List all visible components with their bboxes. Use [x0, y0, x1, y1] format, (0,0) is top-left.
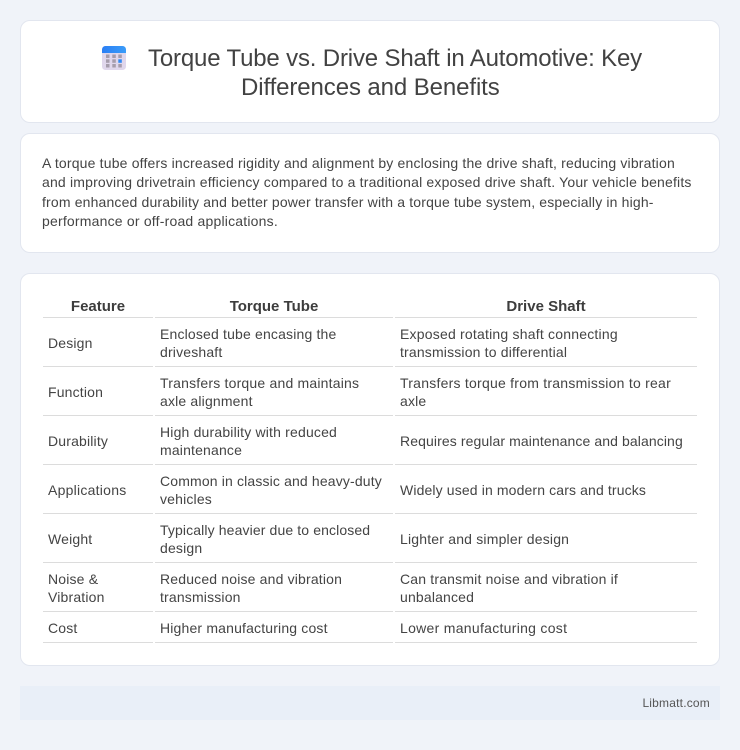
- panel: comparison table: [20, 273, 720, 666]
- panel: summary: [20, 133, 720, 253]
- row: Noise and Vibration: Vibration: [48, 589, 105, 605]
- row: Function: Function: [48, 384, 103, 400]
- row: Noise and Vibration: Can transmit noise and vibration if: [400, 571, 618, 587]
- text block: summary paragraph: and improving drivetrain efficiency compared to a traditional exposed drive shaft. Your vehicle benefits: [42, 174, 692, 190]
- row: Weight: design: [160, 540, 202, 556]
- row: Design: Enclosed tube encasing the: [160, 326, 336, 342]
- row: Function: Transfers torque and maintains: [160, 375, 359, 391]
- table header: Torque Tube: Torque Tube: [230, 298, 318, 315]
- text block: summary paragraph: from enhanced durability and better power transfer with a torque tube system, especially in high-: [42, 194, 654, 210]
- row: Design: driveshaft: [160, 344, 222, 360]
- row: Durability: Durability: [48, 433, 108, 449]
- row: Function: axle: [400, 393, 426, 409]
- text block: summary paragraph: A torque tube offers increased rigidity and alignment by enclosing the drive shaft, reducing vibration: [42, 155, 675, 171]
- row: Cost: [48, 620, 567, 636]
- table header: Drive Shaft: Drive Shaft: [506, 298, 586, 315]
- text block: summary paragraph: performance or off-road applications.: [42, 213, 278, 229]
- row: Durability: Requires regular maintenance and balancing: [400, 433, 683, 449]
- panel: header: [20, 20, 720, 123]
- row: Noise and Vibration: transmission: [160, 589, 241, 605]
- icon: calendar: [102, 46, 126, 70]
- row: Design: Design: [48, 335, 93, 351]
- row: Cost: Cost: [48, 620, 77, 636]
- row: Applications: Common in classic and heavy-duty: [160, 473, 382, 489]
- row: Weight: Typically heavier due to enclosed: [160, 522, 370, 538]
- footer bar: [20, 686, 720, 720]
- row: Applications: [48, 473, 646, 507]
- row: Applications: vehicles: [160, 491, 212, 507]
- row: Cost: Lower manufacturing cost: [400, 620, 567, 636]
- row: Durability: [48, 424, 683, 458]
- table header: Feature: Feature: [71, 298, 125, 315]
- row: Weight: [48, 522, 569, 556]
- row: Function: axle alignment: [160, 393, 253, 409]
- row: Durability: maintenance: [160, 442, 242, 458]
- row: Noise and Vibration: Reduced noise and vibration: [160, 571, 342, 587]
- row: Weight: Weight: [48, 531, 92, 547]
- row: Function: [48, 375, 671, 409]
- row: Applications: Applications: [48, 482, 126, 498]
- row: Durability: High durability with reduced: [160, 424, 337, 440]
- heading: title: Torque Tube vs. Drive Shaft in Automotive: Key: [148, 45, 642, 72]
- row: Applications: Widely used in modern cars and trucks: [400, 482, 646, 498]
- row: Noise and Vibration: unbalanced: [400, 589, 474, 605]
- footer credit: Libmatt.com: [642, 696, 710, 710]
- heading: title: [148, 45, 642, 101]
- row: Design: Exposed rotating shaft connecting: [400, 326, 618, 342]
- row: Noise and Vibration: [48, 571, 618, 605]
- row: Cost: Higher manufacturing cost: [160, 620, 328, 636]
- row: Design: [48, 326, 618, 360]
- row: Function: Transfers torque from transmission to rear: [400, 375, 671, 391]
- text block: summary paragraph: [42, 155, 692, 229]
- heading: title: Differences and Benefits: [241, 74, 500, 101]
- row: Weight: Lighter and simpler design: [400, 531, 569, 547]
- row: Noise and Vibration: Noise &: [48, 571, 98, 587]
- row: Design: transmission to differential: [400, 344, 567, 360]
